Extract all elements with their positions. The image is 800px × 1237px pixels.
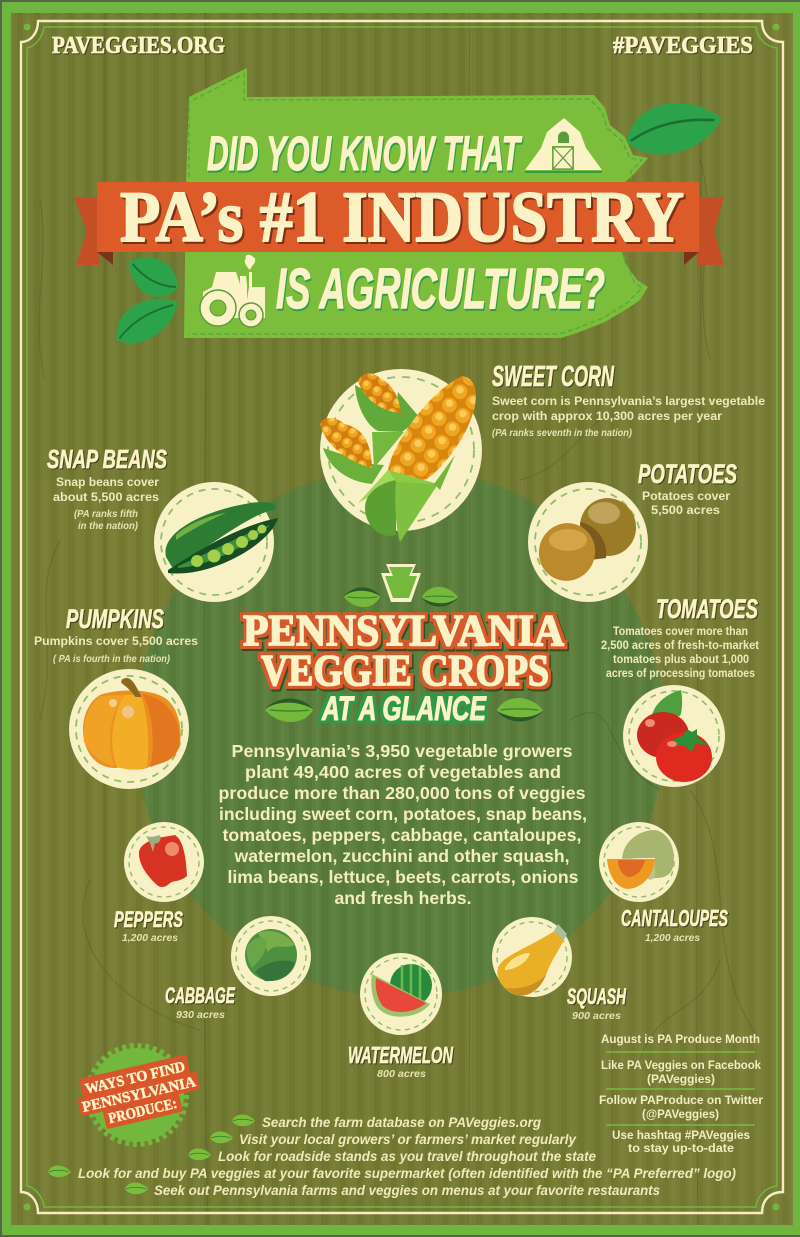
ribbon banner — [74, 177, 724, 265]
panel heading: pennsylvania veggie crops: VEGGIE CROPS — [261, 646, 549, 695]
cabbage label: CABBAGE — [165, 983, 236, 1008]
cabbage label: 930 acres — [176, 1010, 225, 1021]
tomatoes label: tomatoes plus about 1,000 — [613, 654, 749, 666]
social and tips list: August is PA Produce Month — [601, 1032, 760, 1046]
body text — [218, 741, 587, 908]
body text: produce more than 280,000 tons of veggies — [218, 783, 586, 803]
potatoes label: 5,500 acres — [651, 505, 720, 517]
badge: ways to find: PENNSYLVANIA — [81, 1074, 197, 1116]
tomatoes illustration — [623, 685, 725, 787]
icon: tractor — [200, 255, 265, 327]
snap beans illustration — [154, 482, 278, 602]
pumpkins label: Pumpkins cover 5,500 acres — [34, 636, 198, 648]
potatoes label: POTATOES — [638, 459, 737, 489]
panel heading: pennsylvania veggie crops — [243, 606, 564, 695]
badge: ways to find: WAYS TO FIND — [84, 1059, 187, 1098]
potatoes label: Potatoes cover — [642, 491, 731, 503]
pumpkins label — [34, 604, 198, 665]
social and tips list: (@PAVeggies) — [642, 1107, 719, 1121]
squash illustration — [492, 917, 572, 997]
squash label: 900 acres — [572, 1011, 621, 1022]
body text: lima beans, lettuce, beets, carrots, onions — [228, 867, 579, 887]
social and tips list: to stay up-to-date — [628, 1141, 734, 1155]
leaf right of keystone — [422, 587, 458, 607]
snap beans label: SNAP BEANS — [47, 444, 167, 474]
sweet corn label: Sweet corn is Pennsylvania’s largest vegetable — [492, 396, 765, 408]
social and tips list: Follow PAProduce on Twitter — [599, 1093, 763, 1107]
leaf left of glance — [265, 698, 313, 722]
leaf: lower left upper — [119, 247, 186, 306]
watermelon label: WATERMELON — [348, 1042, 453, 1068]
sweet corn label: SWEET CORN — [492, 361, 615, 393]
ribbon text: PA’s #1 INDUSTRY — [120, 177, 684, 257]
social and tips list — [599, 1032, 763, 1155]
cantaloupe illustration — [599, 822, 679, 902]
social and tips list: Like PA Veggies on Facebook — [601, 1058, 761, 1072]
snap beans label: (PA ranks fifth — [74, 509, 138, 520]
watermelon label: 800 acres — [377, 1069, 426, 1080]
watermelon label — [348, 1042, 453, 1080]
potatoes label — [638, 459, 737, 517]
body text: tomatoes, peppers, cabbage, cantaloupes, — [222, 825, 582, 845]
body text: including sweet corn, potatoes, snap beans, — [219, 804, 587, 824]
sweet corn illustration — [320, 369, 482, 542]
pumpkins label: PUMPKINS — [66, 604, 164, 634]
peppers label — [114, 907, 183, 944]
pumpkin illustration — [69, 669, 189, 789]
body text: watermelon, zucchini and other squash, — [233, 846, 570, 866]
heading: is agriculture: IS AGRICULTURE? — [276, 257, 605, 321]
peppers illustration — [124, 822, 204, 902]
tomatoes label — [601, 594, 759, 680]
social and tips list: Use hashtag #PAVeggies — [612, 1128, 750, 1142]
leaf right of glance — [497, 698, 543, 722]
snap beans label: Snap beans cover — [56, 477, 160, 489]
cantaloupes label: 1,200 acres — [645, 933, 700, 944]
header link: PAVEGGIES.ORG — [52, 33, 225, 59]
body text: plant 49,400 acres of vegetables and — [245, 762, 561, 782]
icon: barn — [525, 118, 602, 173]
green backdrop circle — [135, 467, 665, 997]
leaf left of keystone — [344, 587, 380, 607]
body text: Pennsylvania’s 3,950 vegetable growers — [232, 741, 573, 761]
peppers label: 1,200 acres — [122, 933, 178, 944]
squash label: SQUASH — [567, 984, 627, 1009]
leaf: top right — [620, 92, 727, 164]
keystone icon — [381, 564, 421, 602]
sweet corn label — [492, 361, 765, 439]
watermelon illustration — [360, 953, 442, 1035]
cantaloupes label — [621, 905, 728, 944]
snap beans label: in the nation) — [78, 521, 139, 532]
subheading: at a glance: AT A GLANCE — [321, 690, 487, 728]
snap beans label — [47, 444, 167, 532]
peppers label: PEPPERS — [114, 907, 183, 932]
sweet corn label: (PA ranks seventh in the nation) — [492, 428, 633, 439]
body text: and fresh herbs. — [334, 888, 472, 908]
ways list with leaf bullets: Seek out Pennsylvania farms and veggies on menus at your favorite restaurants — [154, 1182, 660, 1198]
ways list with leaf bullets — [48, 1114, 736, 1198]
cantaloupes label: CANTALOUPES — [621, 905, 728, 931]
badge: ways to find: PRODUCE: — [107, 1096, 179, 1127]
cabbage label — [165, 983, 236, 1021]
leaf: lower left lower — [106, 285, 187, 354]
ways list with leaf bullets: Search the farm database on PAVeggies.org — [262, 1114, 541, 1130]
cabbage illustration — [231, 916, 311, 996]
heading: did you know that: DID YOU KNOW THAT — [207, 128, 522, 181]
tomatoes label: acres of processing tomatoes — [606, 668, 755, 680]
snap beans label: about 5,500 acres — [53, 492, 159, 504]
panel heading: pennsylvania veggie crops: PENNSYLVANIA — [243, 606, 564, 655]
badge: ways to find — [73, 1046, 204, 1144]
sweet corn label: crop with approx 10,300 acres per year — [492, 411, 723, 423]
tomatoes label: 2,500 acres of fresh-to-market — [601, 640, 759, 652]
Pennsylvania map shape — [184, 68, 648, 338]
social and tips list: (PAVeggies) — [647, 1072, 715, 1086]
ways list with leaf bullets: Look for and buy PA veggies at your favorite supermarket (often identified with the “PA Preferred” logo) — [78, 1165, 736, 1181]
ways list with leaf bullets: Look for roadside stands as you travel throughout the state — [218, 1148, 596, 1164]
potatoes illustration — [528, 482, 648, 602]
pumpkins label: ( PA is fourth in the nation) — [53, 654, 171, 665]
ways list with leaf bullets: Visit your local growers’ or farmers’ market regularly — [239, 1131, 577, 1147]
tomatoes label: Tomatoes cover more than — [613, 626, 748, 638]
squash label — [567, 984, 627, 1022]
header hashtag: #PAVEGGIES — [613, 33, 753, 59]
